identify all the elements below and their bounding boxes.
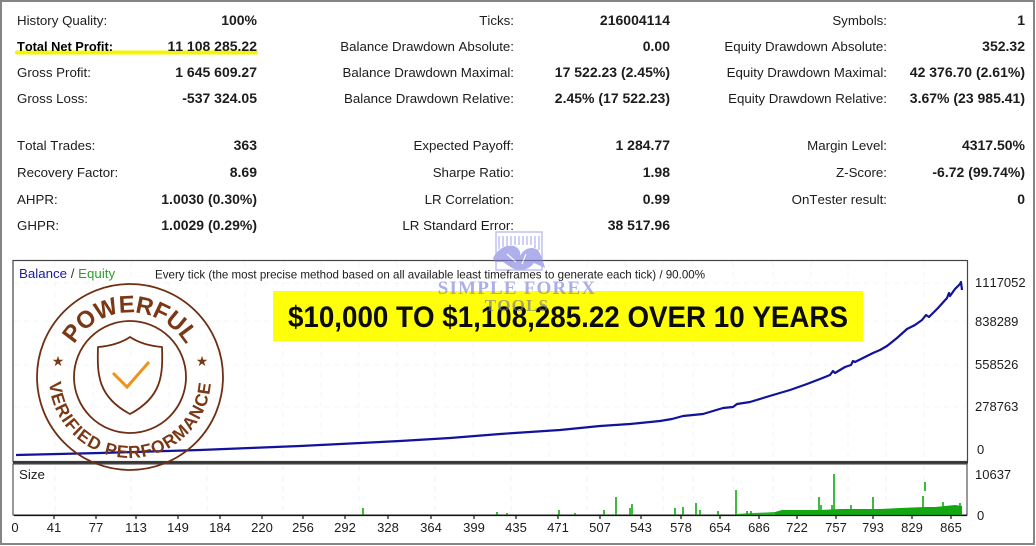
stats table: column 3: 42 376.70 (2.61%) (910, 64, 1025, 80)
stats table: column 1: 1.0030 (0.30%) (161, 191, 257, 207)
stats table: column 2: Sharpe Ratio: (433, 165, 514, 180)
stats table: column 1: 8.69 (230, 164, 257, 180)
yellow headline banner (273, 291, 863, 341)
volume chart frame (13, 462, 968, 515)
watermark text: TOOLS (485, 296, 549, 315)
stats table: column 2: 1 284.77 (616, 137, 670, 153)
y axis labels: balance: 278763 (975, 399, 1018, 414)
stats table: column 1: Recovery Factor: (17, 165, 118, 180)
stats table: column 2: LR Correlation: (425, 192, 514, 207)
stats table: column 2: Expected Payoff: (413, 138, 514, 153)
stats table: column 1: 1.0029 (0.29%) (161, 217, 257, 233)
x axis labels: 149 (167, 520, 189, 535)
x axis labels: 654 (709, 520, 731, 535)
yellow headline banner: $10,000 TO $1,108,285.22 OVER 10 YEARS (288, 301, 848, 334)
x axis labels: 399 (463, 520, 485, 535)
x axis labels: 77 (89, 520, 103, 535)
y axis labels: balance: 1117052 (975, 275, 1026, 290)
chart legend: balance and equity: Balance / Equity (19, 266, 115, 281)
stats table: column 3: -6.72 (99.74%) (932, 164, 1025, 180)
badge: powerful verified performance (36, 283, 224, 471)
stats table: column 1: GHPR: (17, 218, 59, 233)
x axis labels: 41 (47, 520, 61, 535)
stats table: column 3: 3.67% (23 985.41) (910, 90, 1025, 106)
y axis labels: balance: 558526 (975, 357, 1018, 372)
stats table: column 1: Gross Profit: (17, 65, 91, 80)
x axis labels: 292 (334, 520, 356, 535)
stats table: column 1: Total Trades: (17, 138, 95, 153)
stats table: column 1: Gross Loss: (17, 91, 88, 106)
icon: check mark (113, 362, 149, 387)
volume label: Size (19, 467, 45, 482)
stats table: column 2: Ticks: (479, 13, 514, 28)
x axis labels: 757 (825, 520, 847, 535)
stats table: column 2 (340, 12, 670, 233)
stats table: column 3: Equity Drawdown Absolute: (724, 39, 887, 54)
stats table: column 2: 38 517.96 (608, 217, 670, 233)
chart subtitle: Every tick (the most precise method based on all available least timeframes to generate each tick) / 90.00% (155, 268, 705, 282)
stats table: column 1: 363 (234, 137, 257, 153)
stats table: column 2: 216004114 (600, 12, 670, 28)
stats table: column 1: 100% (221, 12, 258, 28)
badge stars (52, 353, 208, 369)
stats table: column 1: 1 645 609.27 (175, 64, 257, 80)
volume bars (363, 474, 962, 515)
stats table: column 3 (724, 12, 1026, 207)
stats table: column 3: 352.32 (982, 38, 1025, 54)
y axis labels: balance: 0 (977, 442, 984, 457)
icon: shield (98, 337, 162, 414)
stats table: column 3: 4317.50% (962, 137, 1026, 153)
x axis labels: 113 (125, 520, 147, 535)
stats table: column 2: 0.99 (643, 191, 670, 207)
stats table: column 3: Symbols: (832, 13, 887, 28)
x axis labels: 507 (589, 520, 611, 535)
watermark text (438, 278, 596, 315)
stats table: column 1: -537 324.05 (182, 90, 257, 106)
stats table: column 3: 0 (1017, 191, 1025, 207)
x axis labels: 865 (940, 520, 962, 535)
stats table: column 3: Equity Drawdown Relative: (728, 91, 887, 106)
y axis labels: volume: 10637 (975, 467, 1011, 482)
stats table: column 2: LR Standard Error: (402, 218, 514, 233)
stats table: column 2: Balance Drawdown Absolute: (340, 39, 514, 54)
stats table: column 2: 2.45% (17 522.23) (555, 90, 670, 106)
y axis labels: balance (975, 275, 1026, 457)
stats table: column 1: AHPR: (17, 192, 58, 207)
icon: bull and bear (493, 232, 545, 270)
badge rings (37, 284, 223, 470)
x axis labels: 328 (377, 520, 399, 535)
balance curve (16, 282, 962, 455)
watermark: simple forex tools (438, 232, 596, 315)
x axis labels: 256 (292, 520, 314, 535)
x axis labels: 220 (251, 520, 273, 535)
stats table: column 2: Balance Drawdown Relative: (344, 91, 514, 106)
x axis labels: 0 (11, 520, 19, 535)
stats table: column 1 (15, 12, 258, 233)
x axis baseline with ticks (14, 515, 967, 519)
x axis labels: 435 (505, 520, 527, 535)
stats table: column 1: History Quality: (17, 13, 107, 28)
badge stars: ★ (52, 353, 64, 369)
x axis labels: 829 (901, 520, 923, 535)
stats table: column 3: 1 (1017, 12, 1025, 28)
x axis labels: 578 (670, 520, 692, 535)
x axis labels (11, 520, 962, 535)
badge stars: ★ (196, 353, 208, 369)
x axis labels: 184 (209, 520, 231, 535)
stats table: column 2: 17 522.23 (2.45%) (555, 64, 670, 80)
stats table: column 2: Balance Drawdown Maximal: (343, 65, 514, 80)
x axis labels: 364 (420, 520, 442, 535)
stats table: column 1: Total Net Profit: (17, 39, 113, 54)
stats table: column 3: OnTester result: (792, 192, 887, 207)
x axis labels: 686 (748, 520, 770, 535)
highlight: net profit underline (15, 50, 258, 54)
badge top text: POWERFUL (62, 296, 194, 344)
stats table: column 2: 1.98 (643, 164, 670, 180)
y axis labels: balance: 838289 (975, 314, 1018, 329)
x axis labels: 543 (630, 520, 652, 535)
stats table: column 3: Equity Drawdown Maximal: (727, 65, 887, 80)
stats table: column 3: Margin Level: (807, 138, 887, 153)
balance chart frame (13, 260, 968, 462)
x axis labels: 471 (547, 520, 569, 535)
stats table: column 3: Z-Score: (836, 165, 887, 180)
badge bottom text: VERIFIED PERFORMANCE (50, 380, 211, 458)
y axis labels: volume (975, 467, 1011, 523)
stats table: column 2: 0.00 (643, 38, 670, 54)
watermark text: SIMPLE FOREX (438, 278, 596, 299)
x axis labels: 793 (862, 520, 884, 535)
y axis labels: volume: 0 (977, 508, 984, 523)
x axis labels: 722 (786, 520, 808, 535)
stats table: column 1: 11 108 285.22 (167, 38, 257, 54)
